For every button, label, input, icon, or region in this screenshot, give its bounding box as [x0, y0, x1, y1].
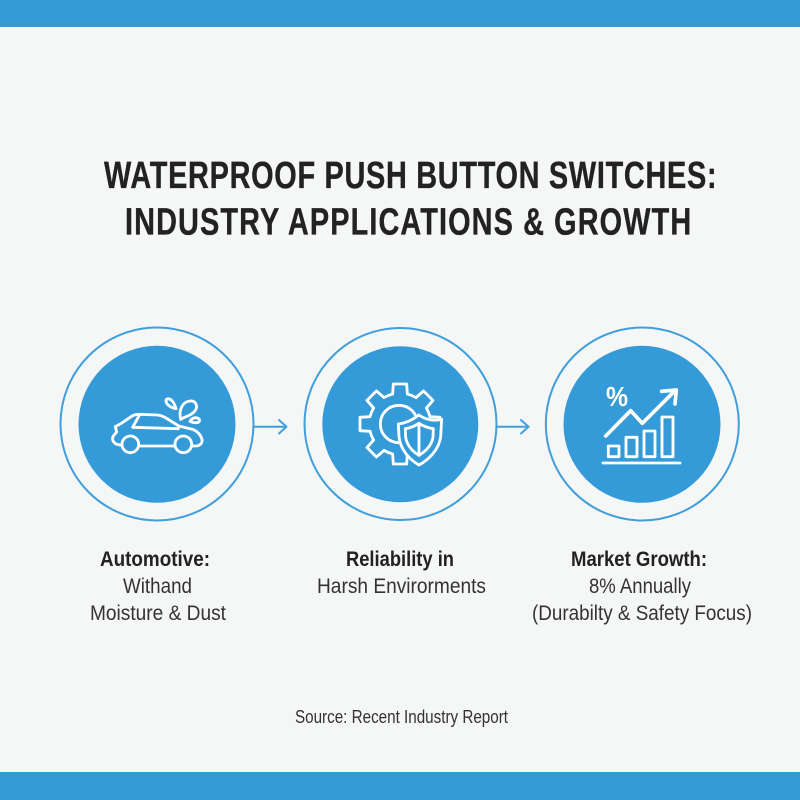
title [104, 154, 717, 244]
arrow: reliability to market growth [497, 420, 528, 434]
top banner [0, 0, 800, 27]
caption: market growth: (Durabilty & Safety Focus) [532, 602, 752, 625]
title: INDUSTRY APPLICATIONS & GROWTH [125, 201, 691, 244]
caption: market growth: Market Growth: [571, 548, 707, 571]
outer ring: reliability [304, 328, 496, 520]
caption: automotive: Withand [123, 575, 192, 598]
icon: car with water drops [113, 399, 202, 453]
outer ring: automotive [60, 328, 254, 520]
caption: reliability: Harsh Envirorments [317, 575, 486, 598]
icon: growth chart with percent [603, 381, 680, 463]
caption: automotive: Moisture & Dust [90, 602, 226, 625]
caption: market growth: 8% Annually [589, 575, 691, 598]
panel: reliability [304, 328, 496, 520]
icon: gear with shield [360, 384, 442, 465]
caption: market growth [532, 548, 752, 625]
bottom banner [0, 772, 800, 800]
arrow: automotive to reliability [254, 420, 286, 434]
caption: automotive [90, 548, 226, 625]
outer ring: market growth [546, 328, 739, 520]
caption: reliability [317, 548, 486, 598]
filled disc: reliability [322, 346, 478, 502]
panel: automotive [60, 328, 254, 520]
icon: growth chart with percent: % [606, 381, 628, 412]
source note: Source: Recent Industry Report [295, 707, 508, 727]
panel: market growth [546, 328, 739, 520]
title: WATERPROOF PUSH BUTTON SWITCHES: [104, 154, 717, 197]
caption: automotive: Automotive: [100, 548, 210, 571]
filled disc: automotive [78, 346, 236, 503]
filled disc: market growth [564, 346, 720, 503]
caption: reliability: Reliability in [346, 548, 454, 571]
